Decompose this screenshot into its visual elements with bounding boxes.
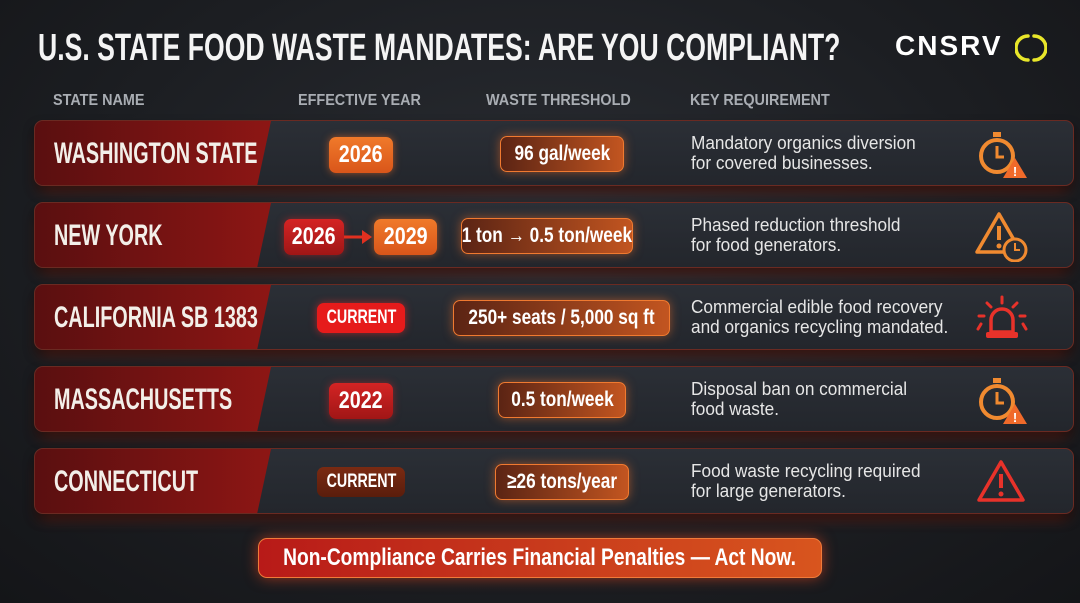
column headers: KEY REQUIREMENT <box>690 92 830 109</box>
column headers: STATE NAME <box>53 92 144 109</box>
panel: Connecticut: Food waste recycling required <box>691 460 921 481</box>
panel: Connecticut: CURRENT <box>326 471 396 492</box>
panel: New York: NEW YORK <box>54 219 163 252</box>
column headers <box>53 92 830 109</box>
panel: Massachusetts: 0.5 ton/week <box>511 388 613 411</box>
panel: New York: Phased reduction threshold <box>691 214 900 235</box>
title: U.S. STATE FOOD WASTE MANDATES: ARE YOU COMPLIANT? <box>38 27 840 69</box>
panel: New York: 1 ton → 0.5 ton/week <box>462 224 632 247</box>
panel: Washington: 96 gal/week <box>514 142 610 165</box>
panel: Connecticut: ≥26 tons/year <box>507 470 617 493</box>
panel: Washington: 2026 <box>339 141 383 168</box>
panel: New York: 2026 <box>292 223 336 250</box>
icon: stopwatch warning <box>979 132 1027 179</box>
panel: California: Commercial edible food recovery <box>691 296 942 317</box>
panel: California: 250+ seats / 5,000 sq ft <box>468 306 655 329</box>
icon: siren <box>976 296 1028 338</box>
panel: Washington: Mandatory organics diversion <box>691 132 916 153</box>
panel: Washington <box>34 120 1074 186</box>
panel: Massachusetts: food waste. <box>691 398 779 419</box>
panel: New York <box>34 202 1074 268</box>
panel: California: CURRENT <box>326 307 396 328</box>
panel: Washington: WASHINGTON STATE <box>54 137 258 170</box>
logo: CNSRV <box>895 30 1003 61</box>
icon: stopwatch warning <box>979 378 1027 425</box>
panel: Massachusetts <box>34 366 1074 432</box>
panel: Massachusetts: Disposal ban on commercial <box>691 378 907 399</box>
callout: penalties: Non-Compliance Carries Financial Penalties — Act Now. <box>284 544 796 571</box>
panel: Massachusetts: 2022 <box>339 387 383 414</box>
icon: stopwatch warning: ! <box>1013 164 1017 179</box>
panel: Massachusetts: MASSACHUSETTS <box>54 383 232 416</box>
panel: Connecticut: for large generators. <box>691 480 846 501</box>
icon: stopwatch warning: ! <box>1013 410 1017 425</box>
logo <box>895 30 1047 62</box>
column headers: WASTE THRESHOLD <box>486 92 631 109</box>
panel: California <box>34 284 1074 350</box>
panel: California: and organics recycling mandated. <box>691 316 948 337</box>
icon: logo ring <box>1015 34 1047 62</box>
panel: Connecticut: CONNECTICUT <box>54 465 198 498</box>
panel: New York: 2029 <box>384 223 427 250</box>
panel: New York: for food generators. <box>691 234 841 255</box>
panel: Washington: for covered businesses. <box>691 152 873 173</box>
icon: warning triangle <box>977 460 1025 502</box>
column headers: EFFECTIVE YEAR <box>298 92 421 109</box>
callout: penalties <box>258 538 822 578</box>
arrow <box>344 230 372 244</box>
panel: Connecticut <box>34 448 1074 514</box>
panel: California: CALIFORNIA SB 1383 <box>54 301 258 334</box>
icon: warning clock <box>975 212 1028 262</box>
